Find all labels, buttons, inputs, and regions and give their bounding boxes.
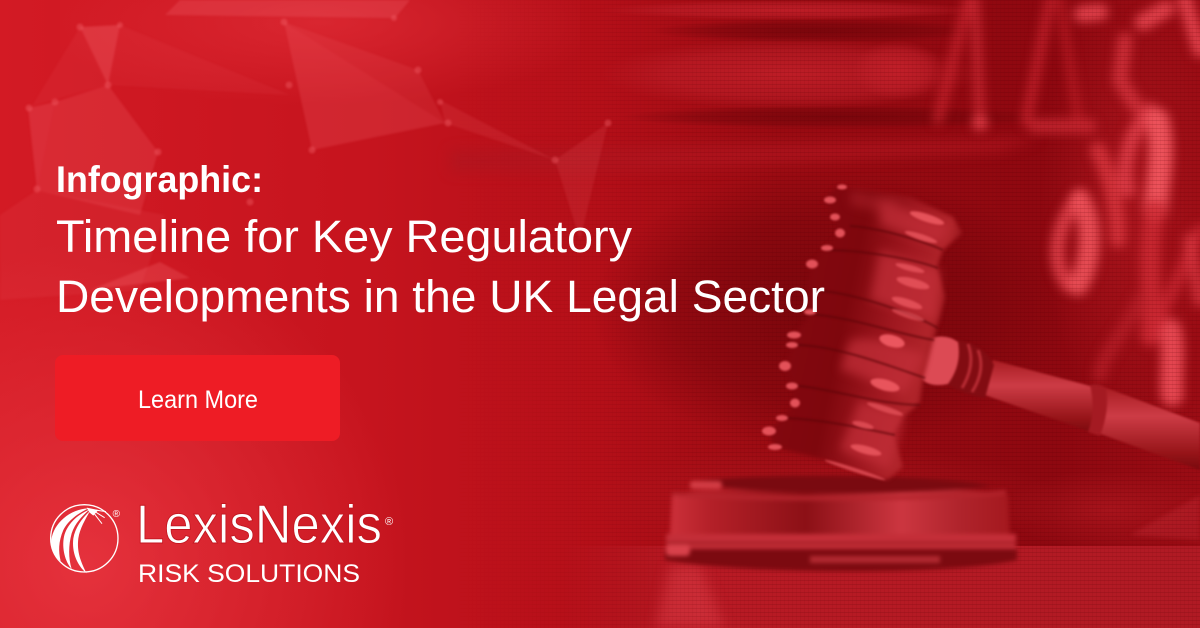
logo: RISK SOLUTIONS <box>138 560 360 588</box>
logo globe icon <box>51 505 121 573</box>
polygon cluster left <box>0 0 410 300</box>
head mottling <box>840 190 950 470</box>
network polygons <box>0 0 612 300</box>
blurred scales of justice <box>938 0 1200 420</box>
call to action button: Learn More <box>138 386 258 414</box>
grid overlay <box>560 0 1200 625</box>
head edge beads <box>762 184 847 450</box>
network nodes <box>26 15 612 206</box>
gavel handle <box>918 336 1200 470</box>
logo wordmark: LexisNexis <box>136 493 382 555</box>
eyebrow heading: Infographic: <box>56 159 263 200</box>
table surface <box>560 470 1200 628</box>
title: Timeline for Key Regulatory <box>56 211 633 262</box>
title <box>56 211 825 322</box>
sound block <box>665 476 1017 571</box>
polygon cluster center <box>284 22 608 240</box>
logo <box>51 493 393 588</box>
head highlights <box>762 184 945 482</box>
logo globe icon: ® <box>113 509 121 520</box>
logo: ® <box>385 516 393 528</box>
title: Developments in the UK Legal Sector <box>56 271 825 322</box>
call to action button <box>55 355 340 441</box>
head ridges <box>785 226 943 435</box>
gavel head <box>762 184 962 482</box>
